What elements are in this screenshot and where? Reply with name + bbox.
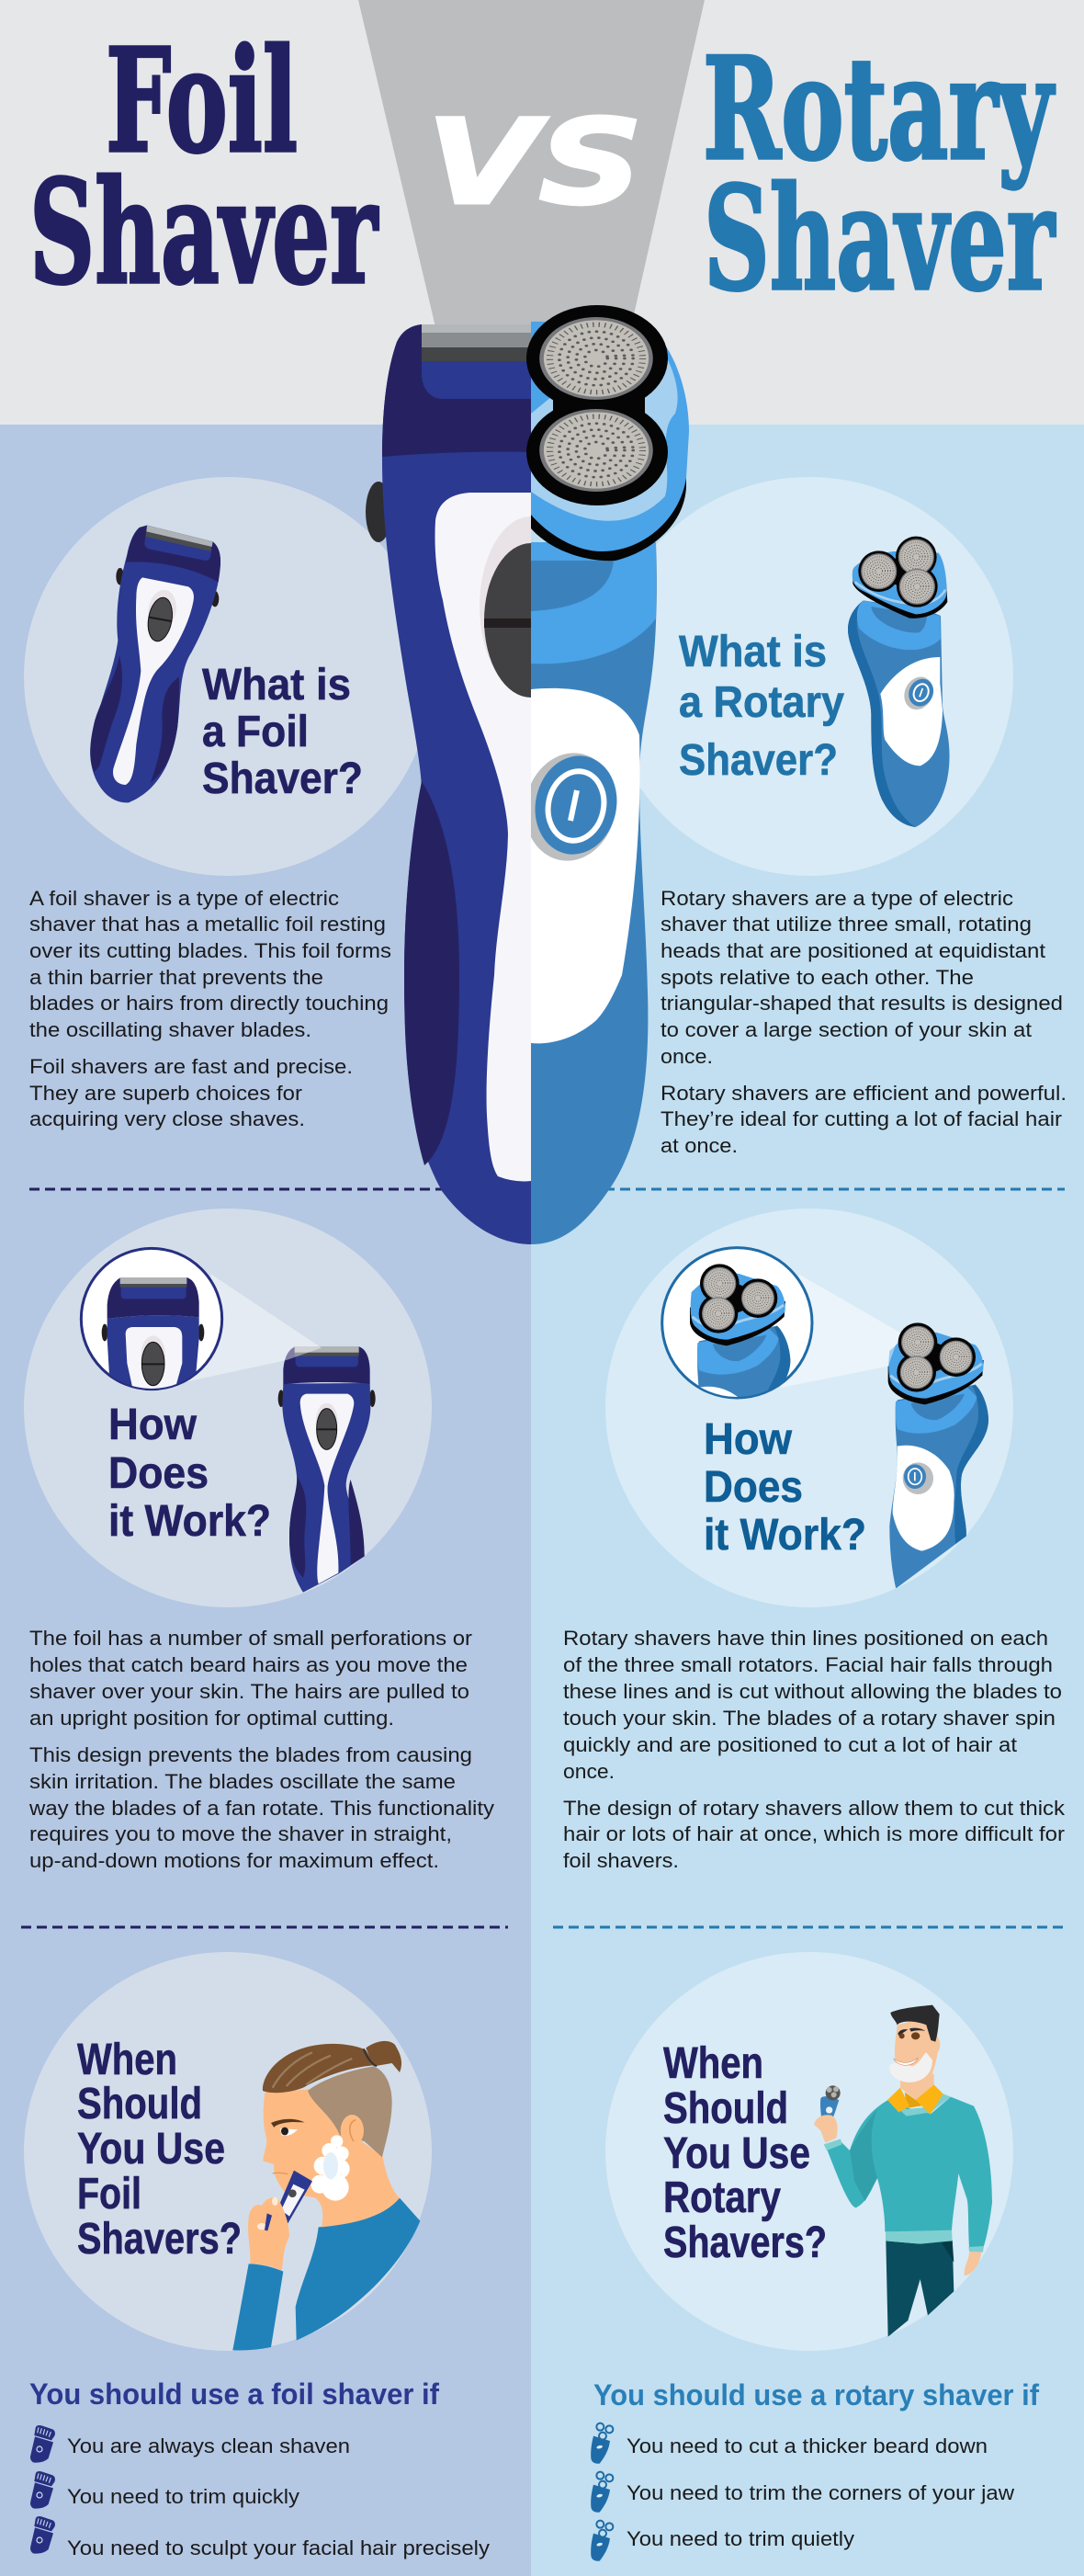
- text: how a foil shaver works: The foil has a number of small perforations or: [29, 1627, 472, 1650]
- list: rotary shaver reasons: [591, 2423, 1014, 2561]
- heading: when to use rotary shavers: [663, 2039, 827, 2267]
- panel: what is a rotary shaver circle: [605, 477, 1013, 876]
- text: how a foil shaver works: requires you to move the shaver in straight,: [29, 1822, 452, 1845]
- header background: [0, 0, 1084, 425]
- heading: when to use rotary shavers: Rotary: [663, 2173, 781, 2222]
- text: foil shaver description: Foil shavers are fast and precise.: [29, 1055, 353, 1078]
- main shaver: rotary half: [515, 305, 689, 1244]
- illustration: foil shaver magnified head: [81, 1248, 376, 1593]
- heading: how does it work rotary: [704, 1415, 866, 1560]
- text: foil shaver description: the oscillating shaver blades.: [29, 1018, 311, 1041]
- text: foil shaver description: A foil shaver is a type of electric: [29, 887, 339, 910]
- title: VS: VS: [426, 95, 643, 232]
- illustration: man with bun shaving with foil shaver: [232, 2041, 420, 2351]
- heading: what is a rotary shaver: [679, 628, 844, 785]
- heading: what is a foil shaver: [202, 661, 363, 803]
- divider: section one rotary: [604, 1187, 1065, 1191]
- icon: small rotary shaver: [848, 537, 950, 827]
- list item text: [627, 2434, 1014, 2550]
- text: rotary shaver description: at once.: [661, 1134, 738, 1157]
- list: foil shaver reasons: [30, 2425, 490, 2559]
- title: Foil Shaver: [29, 17, 378, 316]
- text: how a rotary shaver works: quickly and are positioned to cut a lot of hair at: [563, 1733, 1017, 1756]
- main shaver: foil half: [366, 324, 531, 1244]
- text: rotary shaver description: triangular-shaped that results is designed: [661, 992, 1063, 1015]
- list item text: You need to trim quietly: [627, 2527, 854, 2550]
- text: foil shaver description: over its cutting blades. This foil forms: [29, 939, 391, 962]
- text: how a rotary shaver works: these lines and is cut without allowing the blades to: [563, 1680, 1062, 1703]
- heading: when to use rotary shavers: When: [663, 2039, 763, 2088]
- heading: when to use foil shavers: You Use: [77, 2125, 225, 2173]
- panel: what is a foil shaver circle: [24, 477, 432, 876]
- heading: how does it work rotary: it Work?: [704, 1511, 866, 1560]
- heading: when to use rotary shavers: Shavers?: [663, 2219, 827, 2267]
- text: rotary shaver description: [661, 887, 1067, 1157]
- heading: how does it work rotary: Does: [704, 1463, 803, 1512]
- icon: rotary bullet two: [591, 2472, 613, 2513]
- text: rotary shaver description: spots relative to each other. The: [661, 966, 974, 989]
- text: rotary shaver description: Rotary shavers are efficient and powerful.: [661, 1082, 1067, 1105]
- list item text: You need to sculpt your facial hair precisely: [67, 2536, 490, 2559]
- subheading: you should use a rotary shaver if: You should use a rotary shaver if: [593, 2378, 1039, 2411]
- divider: section one foil: [29, 1187, 450, 1191]
- icon: foil bullet two: [30, 2471, 55, 2509]
- panel: how does it work rotary circle: [605, 1209, 1013, 1607]
- text: rotary shaver description: to cover a large section of your skin at: [661, 1018, 1032, 1041]
- text: how a rotary shaver works: Rotary shavers have thin lines positioned on each: [563, 1627, 1048, 1650]
- text: foil shaver description: blades or hairs from directly touching: [29, 992, 389, 1015]
- heading: when to use foil shavers: Shavers?: [77, 2215, 242, 2264]
- spotlight trapezoid: [358, 0, 705, 331]
- list item text: You need to trim quickly: [67, 2485, 299, 2508]
- text: rotary shaver description: once.: [661, 1045, 713, 1068]
- text: rotary shaver description: shaver that utilize three small, rotating: [661, 913, 1032, 936]
- heading: how does it work foil: [108, 1401, 271, 1546]
- divider: section two foil: [21, 1926, 508, 1928]
- panel: foil shaver background: [0, 425, 531, 2576]
- text: how a rotary shaver works: The design of rotary shavers allow them to cut thick: [563, 1797, 1066, 1820]
- illustration: rotary shaver magnified head: [662, 1248, 988, 1588]
- text: foil shaver description: shaver that has a metallic foil resting: [29, 913, 386, 936]
- text: how a rotary shaver works: hair or lots of hair at once, which is more difficult for: [563, 1822, 1065, 1845]
- text: how a rotary shaver works: touch your skin. The blades of a rotary shaver spin: [563, 1707, 1056, 1730]
- heading: what is a foil shaver: What is: [202, 661, 351, 709]
- illustration: smiling man holding rotary shaver: [814, 2005, 992, 2337]
- title: Foil Shaver: Shaver: [29, 148, 378, 316]
- text: how a rotary shaver works: once.: [563, 1760, 615, 1783]
- heading: what is a foil shaver: Shaver?: [202, 755, 363, 803]
- heading: when to use foil shavers: Should: [77, 2080, 202, 2128]
- heading: how does it work foil: it Work?: [108, 1497, 271, 1546]
- heading: what is a rotary shaver: Shaver?: [679, 736, 838, 785]
- title: Foil Shaver: Foil: [106, 17, 298, 185]
- text: how a rotary shaver works: foil shavers.: [563, 1849, 679, 1872]
- heading: when to use foil shavers: Foil: [77, 2170, 141, 2219]
- text: how a foil shaver works: skin irritation. The blades oscillate the same: [29, 1770, 456, 1793]
- heading: what is a rotary shaver: What is: [679, 628, 827, 676]
- text: foil shaver description: [29, 887, 391, 1130]
- icon: foil bullet one: [30, 2425, 55, 2463]
- text: how a foil shaver works: way the blades of a fan rotate. This functionality: [28, 1797, 494, 1820]
- heading: how does it work rotary: How: [704, 1415, 793, 1464]
- icon: rotary bullet one: [591, 2423, 613, 2464]
- heading: what is a rotary shaver: a Rotary: [679, 678, 844, 727]
- text: rotary shaver description: heads that are positioned at equidistant: [661, 939, 1045, 962]
- list item text: You need to cut a thicker beard down: [627, 2434, 988, 2457]
- text: foil shaver description: acquiring very close shaves.: [29, 1107, 305, 1130]
- text: rotary shaver description: Rotary shavers are a type of electric: [661, 887, 1013, 910]
- panel: rotary shaver background: [531, 425, 1084, 2576]
- list item text: You are always clean shaven: [67, 2434, 350, 2457]
- heading: when to use foil shavers: [77, 2036, 242, 2264]
- heading: what is a foil shaver: a Foil: [202, 708, 309, 756]
- heading: when to use rotary shavers: Should: [663, 2084, 788, 2133]
- panel: how does it work foil circle: [24, 1209, 432, 1607]
- text: how a foil shaver works: [28, 1627, 494, 1872]
- panel: when to use rotary circle: [605, 1952, 1013, 2351]
- text: rotary shaver description: They’re ideal for cutting a lot of facial hair: [661, 1107, 1062, 1130]
- text: foil shaver description: a thin barrier that prevents the: [29, 966, 323, 989]
- subheading: you should use a foil shaver if: You should use a foil shaver if: [29, 2377, 439, 2411]
- divider: section two rotary: [553, 1926, 1065, 1928]
- icon: foil bullet three: [30, 2516, 55, 2554]
- heading: when to use foil shavers: When: [77, 2036, 177, 2084]
- text: how a foil shaver works: This design prevents the blades from causing: [29, 1743, 472, 1766]
- text: how a foil shaver works: an upright position for optimal cutting.: [29, 1707, 394, 1730]
- panel: when to use foil circle: [24, 1952, 432, 2351]
- heading: when to use rotary shavers: You Use: [663, 2129, 810, 2178]
- title: Rotary Shaver: [703, 27, 1056, 323]
- text: how a foil shaver works: up-and-down motions for maximum effect.: [29, 1849, 439, 1872]
- text: how a rotary shaver works: [563, 1627, 1066, 1872]
- text: foil shaver description: They are superb choices for: [29, 1082, 302, 1105]
- text: how a foil shaver works: holes that catch beard hairs as you move the: [29, 1653, 468, 1676]
- list item text: [67, 2434, 490, 2559]
- heading: how does it work foil: Does: [108, 1449, 209, 1498]
- icon: rotary bullet three: [591, 2521, 613, 2561]
- text: how a foil shaver works: shaver over your skin. The hairs are pulled to: [29, 1680, 469, 1703]
- heading: how does it work foil: How: [108, 1401, 198, 1449]
- list item text: You need to trim the corners of your jaw: [627, 2481, 1014, 2504]
- icon: small foil shaver: [90, 526, 220, 802]
- text: how a rotary shaver works: of the three small rotators. Facial hair falls through: [563, 1653, 1053, 1676]
